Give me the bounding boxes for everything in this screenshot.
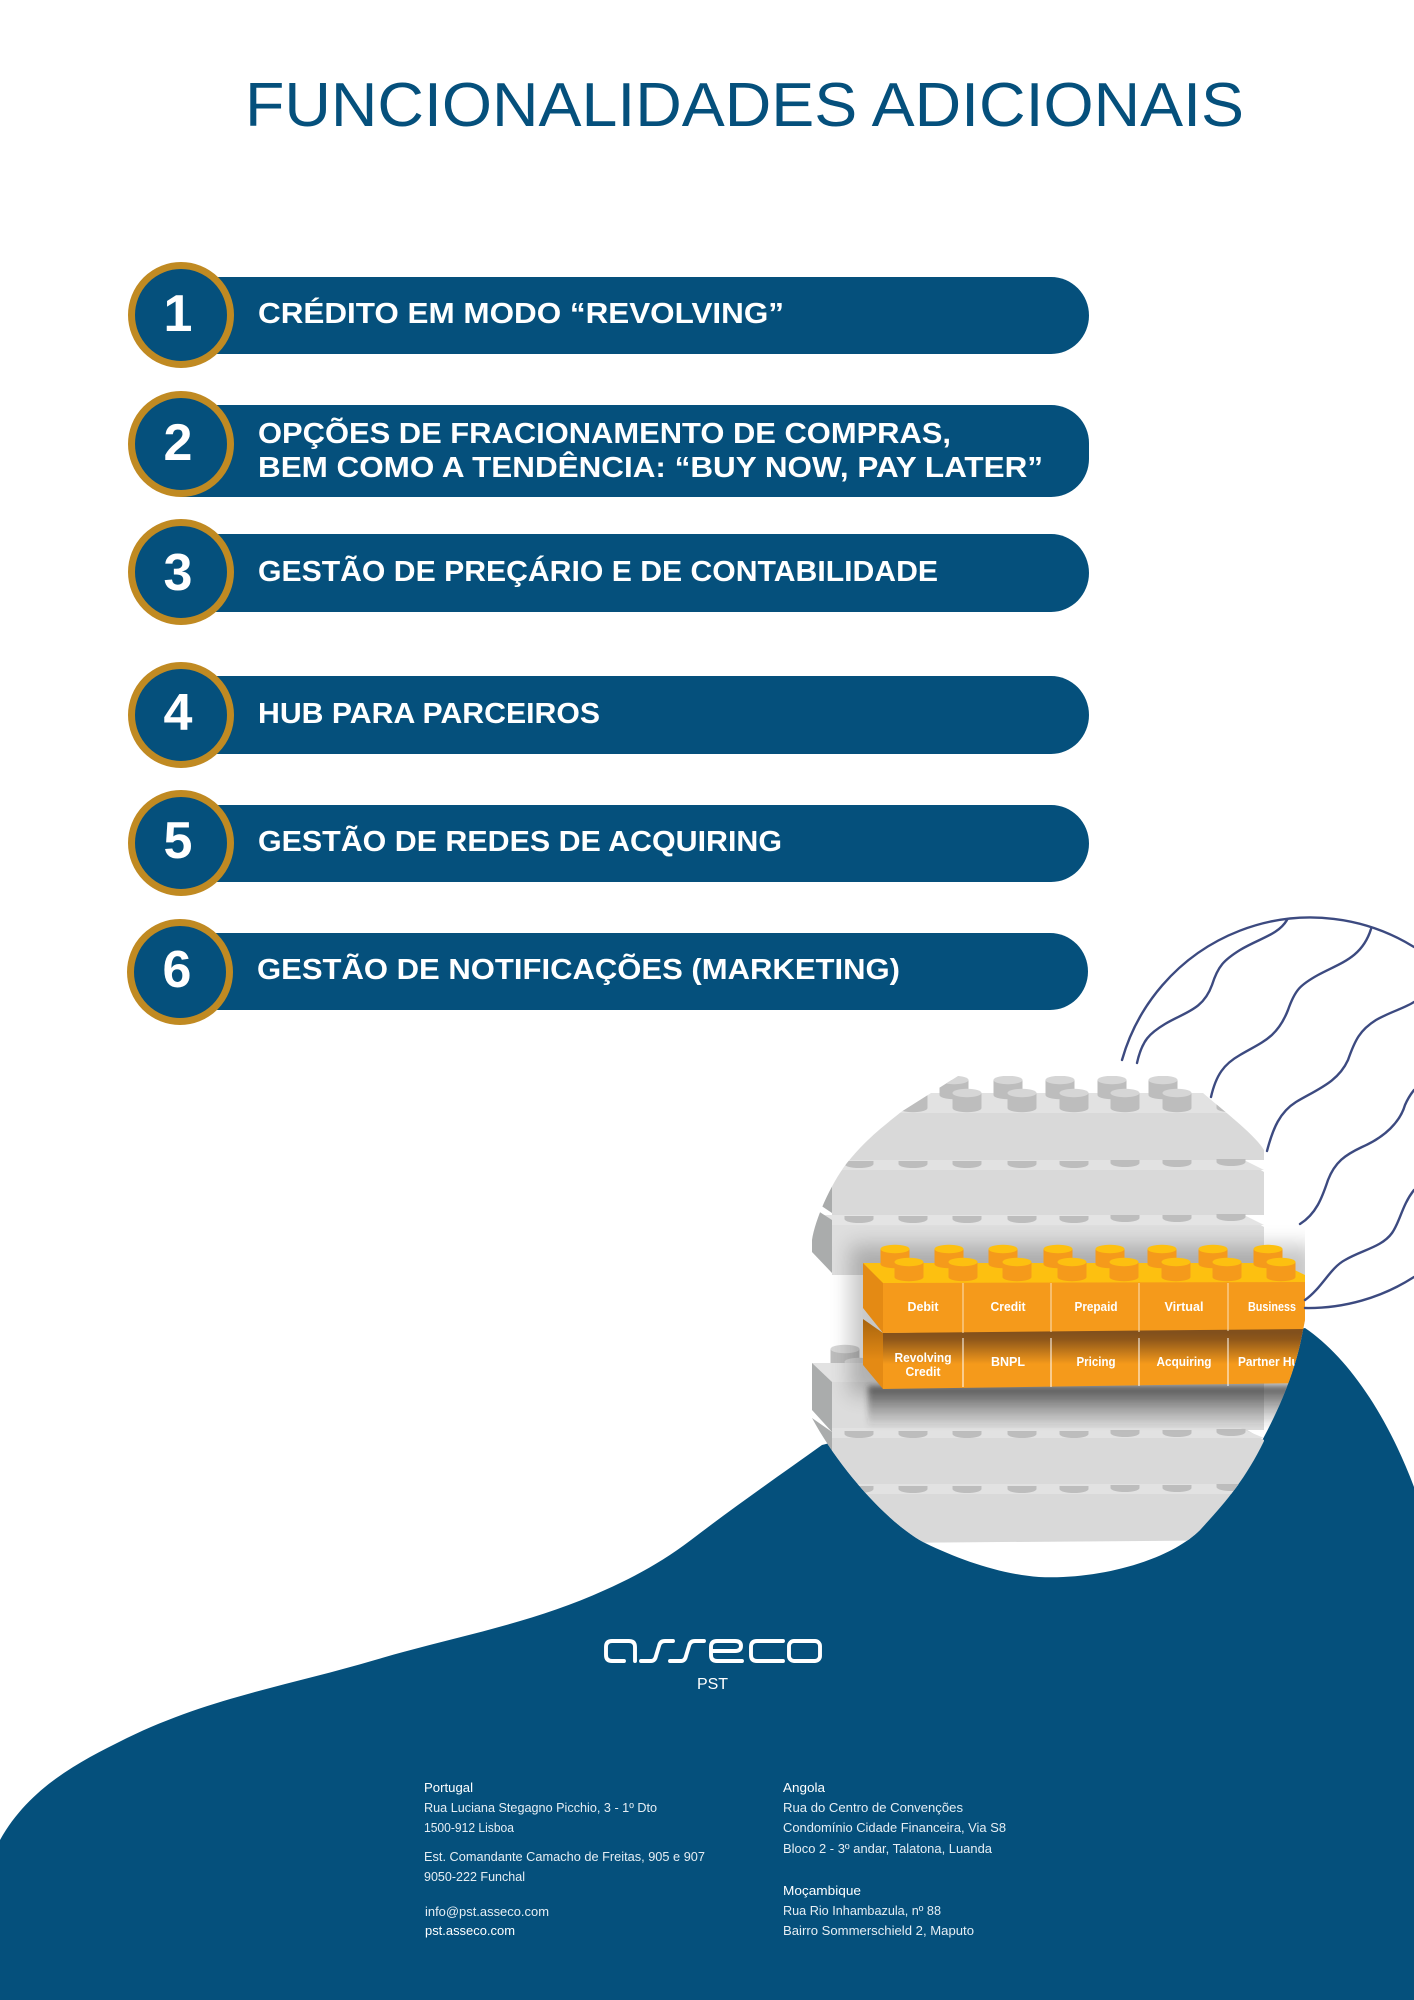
footer address: Moçambique: Rua Rio Inhambazula, nº 88 bbox=[783, 1904, 941, 1918]
lower row labels: Pricing bbox=[1076, 1355, 1116, 1369]
brick drop shadow bbox=[850, 1245, 1315, 1428]
lower row labels: Credit bbox=[906, 1365, 941, 1379]
lower row labels: Revolving bbox=[894, 1351, 952, 1365]
upper row labels: Debit bbox=[908, 1300, 939, 1314]
number badge 6 bbox=[130, 922, 230, 1022]
footer address: Portugal: Rua Luciana Stegagno Picchio, 3 - 1º Dto bbox=[424, 1801, 657, 1815]
list item 1 bbox=[132, 266, 1089, 364]
label 4: HUB PARA PARCEIROS bbox=[258, 698, 600, 730]
list item 5 bbox=[132, 794, 1089, 892]
label 5: GESTÃO DE REDES DE ACQUIRING bbox=[258, 824, 782, 858]
footer address: Portugal: info@pst.asseco.com bbox=[425, 1905, 549, 1919]
footer address: Angola: Condomínio Cidade Financeira, Via S8 bbox=[783, 1821, 1006, 1835]
upper row labels: Business bbox=[1248, 1300, 1296, 1314]
gray brick second bbox=[800, 1159, 1264, 1215]
footer address: Portugal: 1500-912 Lisboa bbox=[424, 1821, 514, 1835]
lower row labels: Partner Hub bbox=[1238, 1355, 1306, 1369]
footer address: Moçambique: Bairro Sommerschield 2, Maputo bbox=[783, 1924, 974, 1938]
upper row labels: Credit bbox=[990, 1300, 1026, 1314]
upper orange brick bbox=[863, 1245, 1305, 1333]
footer address: Portugal: Portugal bbox=[424, 1781, 473, 1795]
number badge 5 bbox=[132, 794, 230, 892]
pill 1 bbox=[181, 277, 1089, 354]
number 1: 1 bbox=[164, 285, 192, 343]
lower row labels bbox=[895, 1352, 1296, 1376]
orange lego bricks bbox=[850, 1245, 1315, 1428]
decorative wire globe bbox=[1122, 917, 1414, 1308]
gray brick lower stack bbox=[812, 1345, 1264, 1543]
footer address: Angola: Bloco 2 - 3º andar, Talatona, Luanda bbox=[783, 1842, 992, 1856]
number badge 2 bbox=[132, 394, 230, 494]
footer address: Moçambique bbox=[783, 1884, 974, 1938]
footer address: Portugal: Est. Comandante Camacho de Freitas, 905 e 907 bbox=[424, 1850, 705, 1864]
footer address: Angola: Rua do Centro de Convenções bbox=[783, 1801, 963, 1815]
gray brick third bbox=[812, 1207, 1264, 1275]
upper row labels: Prepaid bbox=[1074, 1300, 1118, 1314]
footer address: Portugal bbox=[424, 1781, 705, 1938]
label 2: OPÇÕES DE FRACIONAMENTO DE COMPRAS, bbox=[258, 416, 951, 450]
list item 6 bbox=[130, 922, 1088, 1022]
title: FUNCIONALIDADES ADICIONAIS bbox=[245, 71, 1244, 140]
lower row labels: Acquiring bbox=[1156, 1355, 1212, 1369]
logo subtitle: PST bbox=[697, 1676, 728, 1693]
pill 5 bbox=[181, 805, 1089, 882]
number 5: 5 bbox=[164, 812, 192, 870]
label 1: CRÉDITO EM MODO “REVOLVING” bbox=[258, 296, 784, 330]
label 3: GESTÃO DE PREÇÁRIO E DE CONTABILIDADE bbox=[258, 554, 938, 588]
lower orange brick bbox=[863, 1319, 1306, 1389]
number badge 1 bbox=[132, 266, 230, 364]
footer address: Moçambique: Moçambique bbox=[783, 1884, 861, 1898]
footer address: Angola bbox=[783, 1781, 1006, 1856]
pill 6 bbox=[180, 933, 1088, 1010]
label 6: GESTÃO DE NOTIFICAÇÕES (MARKETING) bbox=[257, 952, 900, 986]
logo mark asseco bbox=[606, 1641, 820, 1661]
lower row labels: BNPL bbox=[991, 1355, 1025, 1369]
gray brick top bbox=[850, 1076, 1264, 1160]
number badge 4 bbox=[132, 666, 230, 764]
footer address: Angola: Angola bbox=[783, 1781, 825, 1795]
logo bbox=[606, 1641, 820, 1693]
number 3: 3 bbox=[164, 544, 192, 602]
list item 2 bbox=[132, 394, 1089, 497]
blue wave background bbox=[0, 1328, 1414, 2000]
footer address: Portugal: 9050-222 Funchal bbox=[424, 1870, 525, 1884]
label 2 bbox=[258, 416, 1043, 484]
pill 2 bbox=[181, 405, 1089, 497]
number 2: 2 bbox=[164, 414, 192, 472]
pill 4 bbox=[181, 676, 1089, 754]
footer address: Portugal: pst.asseco.com bbox=[425, 1924, 515, 1938]
number 4: 4 bbox=[164, 684, 193, 742]
number badge 3 bbox=[132, 522, 230, 622]
list item 3 bbox=[132, 522, 1089, 622]
white blob behind bricks bbox=[812, 1230, 1305, 1577]
pill 3 bbox=[181, 534, 1089, 612]
upper row labels bbox=[908, 1302, 1296, 1314]
gray lego bricks bbox=[800, 1076, 1270, 1543]
label 2: BEM COMO A TENDÊNCIA: “BUY NOW, PAY LATER” bbox=[258, 450, 1043, 484]
list item 4 bbox=[132, 666, 1089, 764]
upper row labels: Virtual bbox=[1164, 1300, 1204, 1314]
number 6: 6 bbox=[163, 941, 191, 999]
